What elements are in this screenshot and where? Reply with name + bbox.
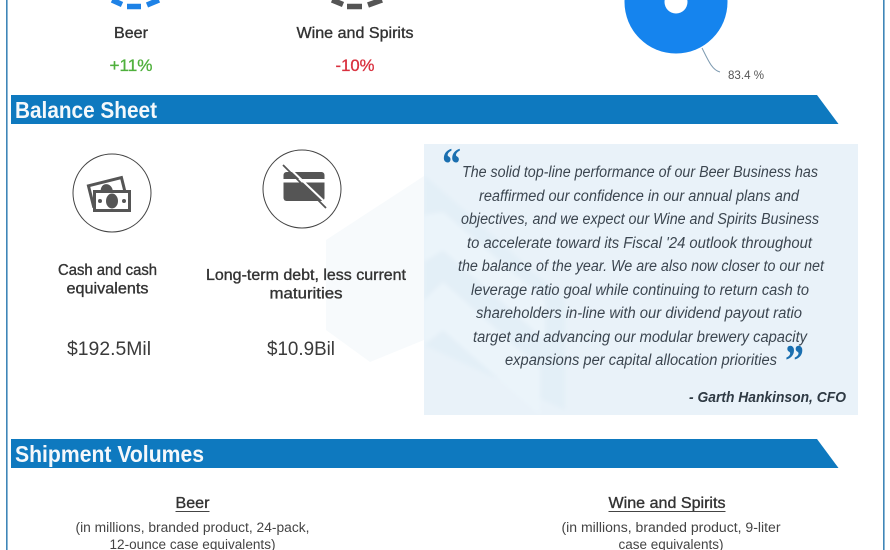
subsection: wine and spirits volumes: Wine and Spirits (608, 495, 726, 512)
heading: Shipment Volumes: Shipment Volumes (15, 441, 204, 467)
quote text: leverage ratio goal while continuing to return cash to (471, 282, 809, 299)
label: Wine and Spirits: Wine and Spirits (296, 25, 414, 42)
label: cash and cash equivalents: Cash and cash (58, 262, 157, 279)
subsection: beer volumes: (in millions, branded product, 24-pack, (76, 520, 310, 535)
panel: CFO quote (424, 138, 858, 415)
label: cash and cash equivalents (58, 262, 157, 298)
icon: wine and spirits donut fragment (332, 0, 382, 6)
pie label: 83.4 % (728, 68, 764, 82)
icon: no credit card (263, 150, 341, 228)
subsection: wine and spirits volumes (562, 495, 781, 550)
subsection: beer volumes (76, 495, 310, 550)
value: cash: $192.5Mil (67, 339, 151, 360)
label: cash and cash equivalents: equivalents (66, 280, 149, 298)
quote text: The solid top-line performance of our Beer Business has (462, 164, 818, 181)
quote attribution: - Garth Hankinson, CFO (689, 389, 846, 406)
quote text: expansions per capital allocation priorities (505, 352, 777, 369)
value: debt: $10.9Bil (267, 339, 335, 360)
icon: closing quote: ” (785, 335, 804, 386)
value: beer change: +11% (110, 56, 152, 75)
label: long-term debt: maturities (270, 286, 343, 302)
label: long-term debt (206, 267, 407, 302)
quote text: objectives, and we expect our Wine and Spirits Business (461, 211, 819, 228)
subsection: wine and spirits volumes: (in millions, branded product, 9-liter (562, 520, 781, 535)
icon: opening quote: “ (442, 138, 461, 189)
label: Beer: Beer (114, 25, 148, 42)
quote text: reaffirmed our confidence in our annual plans and (479, 188, 800, 205)
quote text (458, 164, 825, 369)
heading: Balance Sheet: Balance Sheet (15, 97, 157, 123)
subsection: beer volumes: Beer (176, 495, 210, 512)
value: wine and spirits change: -10% (336, 56, 374, 75)
quote text: the balance of the year. We are also now closer to our net (458, 258, 825, 275)
quote text: to accelerate toward its Fiscal '24 outlook throughout (467, 235, 813, 252)
heading: Shipment Volumes (11, 439, 838, 468)
quote text: target and advancing our modular brewery capacity (473, 329, 808, 346)
icon: beer donut fragment (112, 0, 159, 6)
watermark chevrons (326, 176, 424, 362)
heading: Balance Sheet (11, 95, 838, 124)
pie chart: revenue share (624, 0, 764, 82)
label: long-term debt: Long-term debt, less current (206, 267, 407, 284)
quote text: shareholders in-line with our dividend payout ratio (476, 305, 802, 322)
icon: cash (73, 154, 151, 232)
